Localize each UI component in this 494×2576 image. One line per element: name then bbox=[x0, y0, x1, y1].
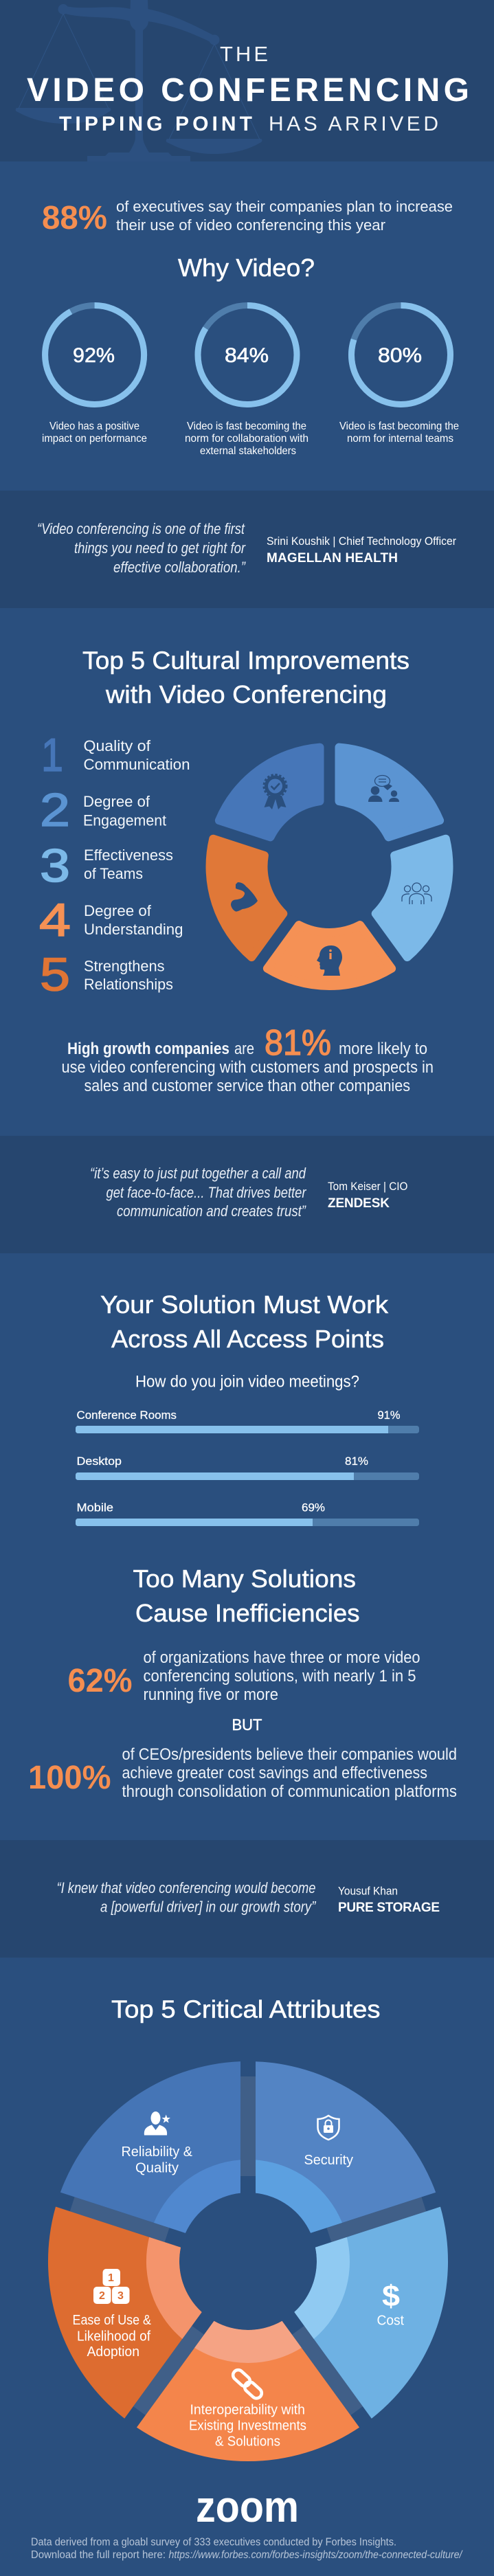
list: cultural improvements: Strengthens bbox=[84, 958, 165, 974]
bar: mobile: 69% bbox=[302, 1501, 325, 1514]
gap strips bbox=[70, 2076, 426, 2415]
donut stat: 84 percent: norm for collaboration with bbox=[185, 433, 308, 445]
bar: desktop: Desktop bbox=[77, 1455, 122, 1468]
list: cultural improvements: Relationships bbox=[84, 976, 173, 993]
list: cultural improvements: Effectiveness bbox=[84, 847, 173, 864]
bar: conference rooms: 91% bbox=[378, 1409, 400, 1422]
title bbox=[27, 42, 469, 135]
segment: strengthens relationships bbox=[170, 825, 304, 957]
title: THE bbox=[220, 42, 268, 66]
icon: dollar sign: $ bbox=[382, 2280, 400, 2313]
icon: numbered blocks: 3 bbox=[117, 2290, 124, 2302]
logo: zoom: zoom bbox=[196, 2482, 299, 2531]
stat: 62 percent: 62% bbox=[67, 1663, 132, 1699]
icon: balance scale watermark bbox=[16, 0, 262, 161]
stat: 62 percent: running five or more bbox=[143, 1685, 278, 1704]
heading: too many solutions: Too Many Solutions bbox=[133, 1565, 356, 1593]
heading: top 5 cultural improvements bbox=[82, 646, 409, 708]
stat: 88 percent: their use of video conferencing this year bbox=[116, 216, 385, 234]
donut stat: 84 percent: external stakeholders bbox=[200, 445, 296, 457]
footnote: Data derived from a gloabl survey of 333 executives conducted by Forbes Insights. bbox=[31, 2537, 396, 2548]
panel: quote Zendesk: communication and creates trust” bbox=[117, 1202, 306, 1220]
segment: quality of communication bbox=[219, 725, 336, 849]
list: cultural improvements: Degree of bbox=[84, 902, 152, 919]
panel: quote Pure Storage: “I knew that video conferencing would become bbox=[56, 1879, 316, 1896]
panel: quote Zendesk: “it’s easy to just put together a call and bbox=[90, 1165, 306, 1182]
donut stat: 80 percent: 80% bbox=[378, 344, 422, 367]
label: ease of use: Ease of Use & bbox=[73, 2313, 152, 2328]
donut stat: 80 percent: norm for internal teams bbox=[347, 433, 453, 445]
heading: access points bbox=[100, 1290, 389, 1353]
panel: quote Magellan Health: “Video conferencing is one of the first bbox=[37, 520, 245, 537]
donut stat: 80 percent bbox=[339, 305, 459, 445]
stat: 81 percent: sales and customer service than other companies bbox=[84, 1077, 410, 1095]
list: cultural improvements: Degree of bbox=[83, 793, 150, 810]
stat: 100 percent: achieve greater cost savings and effectiveness bbox=[122, 1764, 427, 1782]
chart: critical attributes wheel bbox=[0, 2021, 494, 2533]
heading: too many solutions bbox=[133, 1565, 360, 1627]
label: interoperability: Interoperability with bbox=[190, 2402, 305, 2417]
list: cultural improvements: of Teams bbox=[84, 865, 143, 882]
segment: security bbox=[256, 2061, 436, 2233]
panel: quote Magellan Health: MAGELLAN HEALTH bbox=[267, 551, 398, 565]
stat: 81 percent: are bbox=[234, 1040, 254, 1058]
stat: 81 percent: 81% bbox=[265, 1023, 331, 1063]
donut stat: 92 percent: 92% bbox=[73, 344, 115, 367]
segment: degree of understanding bbox=[258, 896, 392, 1028]
icon: chain link bbox=[231, 2368, 264, 2400]
panel: quote Magellan Health: Srini Koushik | Chief Technology Officer bbox=[267, 535, 456, 548]
stat: 100 percent: through consolidation of communication platforms bbox=[122, 1782, 457, 1801]
title: TIPPING POINT bbox=[59, 113, 252, 135]
label: interoperability bbox=[189, 2402, 306, 2449]
icon: head with info bbox=[317, 945, 342, 976]
donut stat: 92 percent: Video has a positive bbox=[49, 421, 139, 432]
label: interoperability: Existing Investments bbox=[189, 2419, 306, 2434]
stat: 81 percent: more likely to bbox=[339, 1040, 427, 1058]
stat: 100 percent bbox=[28, 1745, 457, 1801]
panel: quote Pure Storage: PURE STORAGE bbox=[338, 1901, 440, 1915]
title: HAS ARRIVED bbox=[269, 113, 438, 135]
donut stat: 84 percent: 84% bbox=[225, 344, 269, 367]
list: cultural improvements: 5 bbox=[40, 948, 70, 1000]
subheading: join question: How do you join video meetings? bbox=[135, 1373, 359, 1391]
label: ease of use bbox=[73, 2313, 152, 2360]
stat: 81 percent: use video conferencing with customers and prospects in bbox=[62, 1058, 434, 1077]
panel: quote Zendesk: get face-to-face... That drives better bbox=[106, 1184, 307, 1201]
list: cultural improvements: 4 bbox=[39, 894, 71, 946]
segment: interoperability bbox=[113, 2289, 359, 2533]
icon: numbered blocks: 2 bbox=[99, 2290, 105, 2302]
icon: numbered blocks: 1 bbox=[108, 2272, 114, 2284]
heading: top 5 cultural improvements: with Video Conferencing bbox=[105, 680, 387, 708]
bar: mobile: Mobile bbox=[77, 1501, 113, 1514]
bar chart: how people join bbox=[76, 1409, 419, 1526]
donut stat: 80 percent: Video is fast becoming the bbox=[339, 421, 459, 432]
list: cultural improvements: Engagement bbox=[83, 812, 166, 829]
stat: 100 percent: 100% bbox=[28, 1760, 111, 1796]
heading: why video: Why Video? bbox=[178, 254, 315, 282]
list: cultural improvements: Quality of bbox=[84, 737, 151, 754]
panel: header bbox=[0, 0, 494, 161]
label: ease of use: Adoption bbox=[87, 2344, 139, 2360]
panel: quote Magellan Health bbox=[0, 491, 494, 608]
panel: quote Zendesk: Tom Keiser | CIO bbox=[328, 1180, 408, 1193]
label: reliability and quality: Quality bbox=[135, 2160, 179, 2175]
list: cultural improvements: Understanding bbox=[84, 921, 183, 938]
bar: conference rooms: Conference Rooms bbox=[77, 1409, 177, 1422]
heading: access points: Across All Access Points bbox=[111, 1325, 384, 1353]
icon: numbered blocks bbox=[93, 2269, 129, 2304]
stat: 62 percent: conferencing solutions, with nearly 1 in 5 bbox=[143, 1667, 416, 1685]
stat: 88 percent: 88% bbox=[42, 200, 107, 236]
footnote: https://www.forbes.com/forbes-insights/zoom/the-connected-culture/ bbox=[169, 2549, 463, 2561]
list: cultural improvements bbox=[39, 729, 190, 1000]
icon: flexed arm bbox=[231, 882, 258, 912]
icon: security shield bbox=[317, 2116, 339, 2140]
segment: effectiveness of teams bbox=[360, 839, 477, 963]
panel: quote Zendesk: ZENDESK bbox=[328, 1196, 390, 1211]
panel: quote Pure Storage: Yousuf Khan bbox=[338, 1884, 398, 1898]
heading: top 5 cultural improvements: Top 5 Cultural Improvements bbox=[82, 646, 409, 675]
label: cost: Cost bbox=[377, 2313, 404, 2328]
panel: quote Magellan Health: things you need to get right for bbox=[74, 539, 246, 557]
panel: quote Zendesk bbox=[0, 1136, 494, 1253]
bar: desktop bbox=[76, 1455, 419, 1480]
segment: degree of engagement bbox=[339, 748, 440, 837]
stat: 62 percent bbox=[67, 1648, 420, 1704]
segment: reliability and quality bbox=[60, 2021, 279, 2245]
label: ease of use: Likelihood of bbox=[77, 2329, 150, 2344]
label: security: Security bbox=[304, 2153, 353, 2168]
heading: top 5 critical attributes: Top 5 Critical Attributes bbox=[111, 1995, 381, 2023]
list: cultural improvements: 3 bbox=[40, 840, 70, 892]
stat: 81 percent bbox=[62, 1023, 434, 1095]
donut stat: 92 percent: impact on performance bbox=[42, 433, 147, 445]
panel: quote Pure Storage: a [powerful driver] in our growth story” bbox=[100, 1898, 317, 1916]
icon: team of three bbox=[402, 883, 431, 904]
list: cultural improvements: Communication bbox=[84, 756, 190, 773]
icon: award rosette bbox=[264, 775, 286, 809]
stat: 62 percent: of organizations have three or more video bbox=[143, 1648, 420, 1667]
bar: mobile bbox=[76, 1501, 419, 1526]
bar: desktop: 81% bbox=[345, 1455, 368, 1468]
donut stat: 84 percent: Video is fast becoming the bbox=[187, 421, 306, 432]
footnote: Download the full report here: bbox=[31, 2549, 166, 2561]
stat: 81 percent: High growth companies bbox=[67, 1040, 229, 1058]
donut stat: 92 percent bbox=[42, 305, 147, 445]
donut stat: 84 percent bbox=[185, 305, 308, 457]
stat: 88 percent bbox=[42, 198, 453, 236]
label: reliability and quality: Reliability & bbox=[121, 2144, 193, 2160]
list: cultural improvements: 2 bbox=[40, 784, 70, 836]
stat: 88 percent: of executives say their companies plan to increase bbox=[116, 198, 453, 215]
icon: person with star bbox=[144, 2112, 170, 2136]
panel: quote Pure Storage bbox=[0, 1840, 494, 1958]
label: reliability and quality bbox=[121, 2144, 193, 2175]
footnote bbox=[31, 2537, 463, 2561]
bar: conference rooms bbox=[76, 1409, 419, 1433]
segment: cost bbox=[278, 2207, 494, 2431]
icon: people with speech bubbles bbox=[368, 775, 399, 802]
heading: too many solutions: Cause Inefficiencies bbox=[135, 1599, 360, 1627]
text: but: BUT bbox=[232, 1716, 262, 1734]
stat: 100 percent: of CEOs/presidents believe their companies would bbox=[122, 1745, 457, 1764]
heading: access points: Your Solution Must Work bbox=[100, 1290, 389, 1319]
segment: ease of use bbox=[0, 2174, 225, 2419]
list: cultural improvements: 1 bbox=[41, 729, 63, 781]
label: interoperability: & Solutions bbox=[215, 2434, 280, 2449]
panel: quote Magellan Health: effective collaboration.” bbox=[113, 559, 246, 576]
chart: cultural improvements wheel bbox=[170, 725, 477, 1028]
title: VIDEO CONFERENCING bbox=[27, 72, 469, 109]
